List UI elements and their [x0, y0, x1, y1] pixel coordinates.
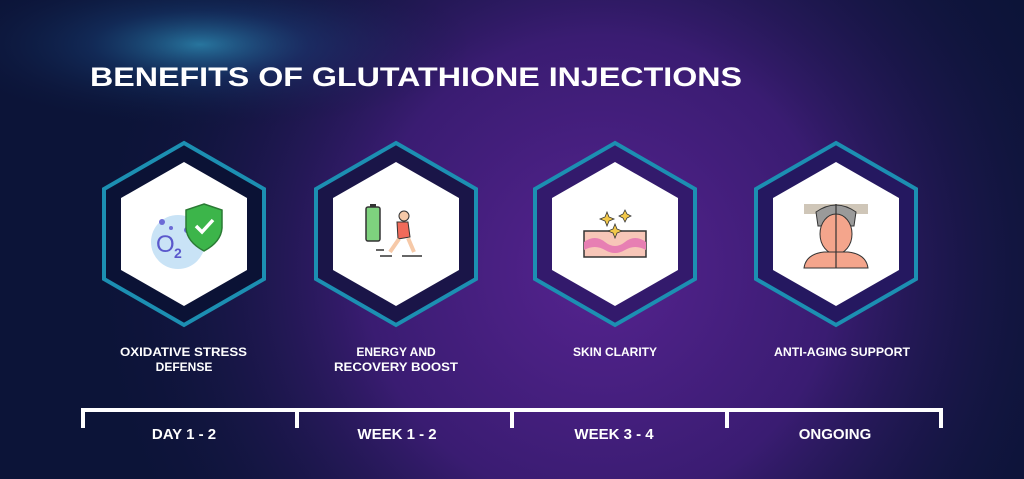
timeline: DAY 1 - 2 [152, 426, 216, 443]
benefit labels: DEFENSE [156, 360, 212, 374]
benefit labels [120, 345, 911, 374]
timeline: WEEK 1 - 2 [357, 426, 437, 443]
hexagon card: anti-aging [756, 143, 916, 325]
icon: O2 shield: 2 [174, 245, 182, 261]
benefit labels: ANTI-AGING SUPPORT [774, 345, 911, 359]
icon: battery runner [366, 204, 422, 256]
title: BENEFITS OF GLUTATHIONE INJECTIONS [90, 62, 742, 92]
timeline: WEEK 3 - 4 [574, 426, 654, 443]
hexagon card: skin [535, 143, 695, 325]
icon: face [804, 204, 868, 268]
hexagon card: oxidative stress [104, 143, 264, 325]
benefit labels: ENERGY AND [356, 345, 436, 359]
icon: O2 shield [151, 204, 222, 269]
benefit labels: RECOVERY BOOST [334, 360, 459, 374]
hexagon card: energy [316, 143, 476, 325]
benefit labels: OXIDATIVE STRESS [120, 345, 247, 359]
icon: skin clarity [584, 210, 646, 257]
benefit labels: SKIN CLARITY [573, 345, 657, 359]
icon: O2 shield: O [156, 231, 175, 258]
timeline: ONGOING [799, 426, 871, 443]
timeline [83, 410, 941, 443]
